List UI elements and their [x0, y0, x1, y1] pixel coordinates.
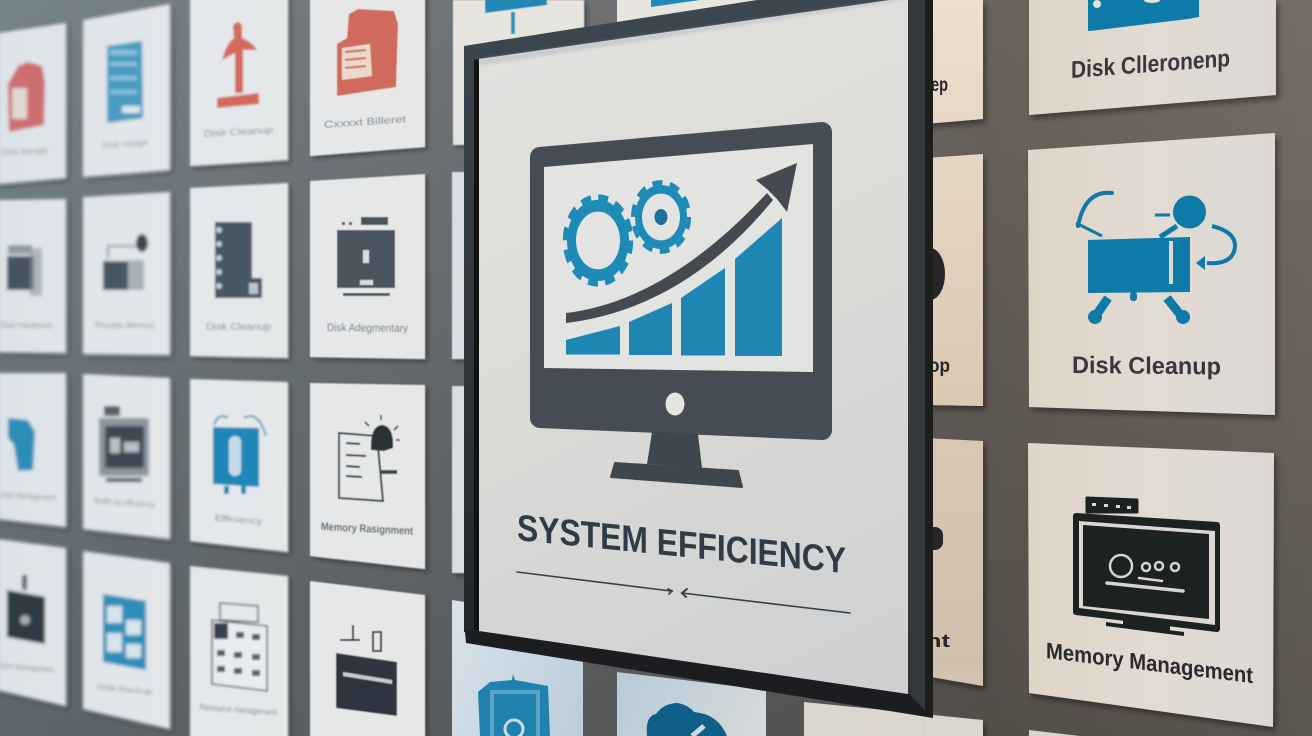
panel: cards behind the main frame: [452, 0, 983, 736]
card: blue panels: Disk Backup: [97, 682, 153, 697]
card: top middle: [617, 0, 780, 30]
card: red folder: Cxxxxt Billeret: [324, 114, 406, 131]
label: Disk Clleronenp: [1071, 45, 1230, 84]
card: bottom right sliver: [1029, 730, 1080, 736]
paper: [479, 0, 908, 694]
card: device with ball: [83, 192, 170, 355]
card: device with ball: Process Memory: [95, 321, 155, 330]
monitor body: [540, 132, 822, 430]
panel: right narrow cards: [915, 0, 983, 736]
card strip row 2: [915, 154, 983, 406]
card: note with bulb: Memory Rasignment: [321, 521, 413, 538]
icon: large gear: [565, 197, 631, 284]
card strip row 4: [925, 717, 983, 736]
icon: small gear: [633, 183, 689, 251]
panel: main framed sign: [464, 0, 933, 718]
icon: blue disk: [1088, 0, 1199, 31]
card: dark device: [0, 199, 66, 353]
card strip row 3: [925, 438, 983, 686]
card: blue panels: [83, 551, 170, 729]
icon: cleanup monitor: [1076, 193, 1235, 324]
card: blue thermometer: [190, 379, 288, 552]
title: SYSTEM EFFICIENCY: [517, 506, 846, 581]
monitor screen: [544, 144, 813, 372]
card strip row 2: op: [929, 356, 950, 377]
card: red storage: Disk Storage: [2, 146, 49, 157]
card: dark list: Disk Cleanup: [206, 322, 271, 333]
frame: [464, 0, 933, 718]
card: blue figure: [0, 373, 66, 527]
card: top blue sign: [453, 0, 584, 145]
card: bottom cloud: [617, 672, 766, 736]
card strip row 3: nt: [926, 631, 950, 651]
card: calendar grid: Resource management: [200, 702, 277, 717]
card: dark screen: Disk Management: [0, 661, 55, 674]
card: blue thermometer: Efficiency: [215, 513, 263, 526]
home button: [666, 392, 684, 416]
panel: right cards: [1028, 0, 1276, 736]
card: blue document: Disk Usage: [102, 138, 149, 150]
card: bottom right small: [804, 702, 983, 736]
card: blue figure: Disk Management: [0, 490, 57, 502]
label: Disk Cleanup: [1072, 352, 1221, 380]
arrow: right pointer: [682, 589, 850, 613]
panel: far-left card column: [0, 23, 66, 706]
card: red arrow: [190, 0, 288, 166]
arrow: left pointer: [517, 572, 672, 594]
card: memory management: [1028, 443, 1274, 727]
label: Memory Management: [1046, 638, 1253, 688]
card: bottom blue panel: [452, 600, 583, 736]
card: calendar grid: [190, 566, 288, 736]
panel: third card column: [190, 0, 288, 736]
panel: second card column: [83, 4, 170, 729]
card: monitor: Build up efficiency: [94, 496, 155, 509]
card: disk clleronenp: [1029, 0, 1276, 115]
icon: monitor: [540, 132, 822, 487]
card: red arrow: Disk Cleanup: [204, 125, 273, 140]
card: red folder: [310, 0, 425, 156]
card: dark safe: Disk Adegmentary: [327, 322, 408, 335]
side card strips: [452, 172, 470, 573]
bar chart: [566, 218, 782, 356]
card: red storage: [0, 23, 66, 184]
card strip row 1: ep: [931, 75, 948, 96]
shadow along frame top: [479, 0, 908, 66]
card: dark screen: [0, 539, 66, 706]
arrow: growth: [566, 163, 797, 323]
panel: fourth card column: [310, 0, 425, 736]
card: blue document: [83, 4, 170, 177]
card: dark safe: [310, 174, 425, 359]
card: disk cleanup: [1028, 133, 1275, 415]
icon: memory monitor: [1076, 498, 1217, 636]
card: dark device: Disk Hardware: [0, 321, 53, 330]
card: monitor: [83, 374, 170, 539]
card strip row 1: [925, 0, 983, 124]
monitor stand: [611, 432, 742, 487]
card: dark list: [190, 183, 288, 358]
card: dark panel: [310, 581, 425, 736]
card: note with bulb: [310, 383, 425, 569]
